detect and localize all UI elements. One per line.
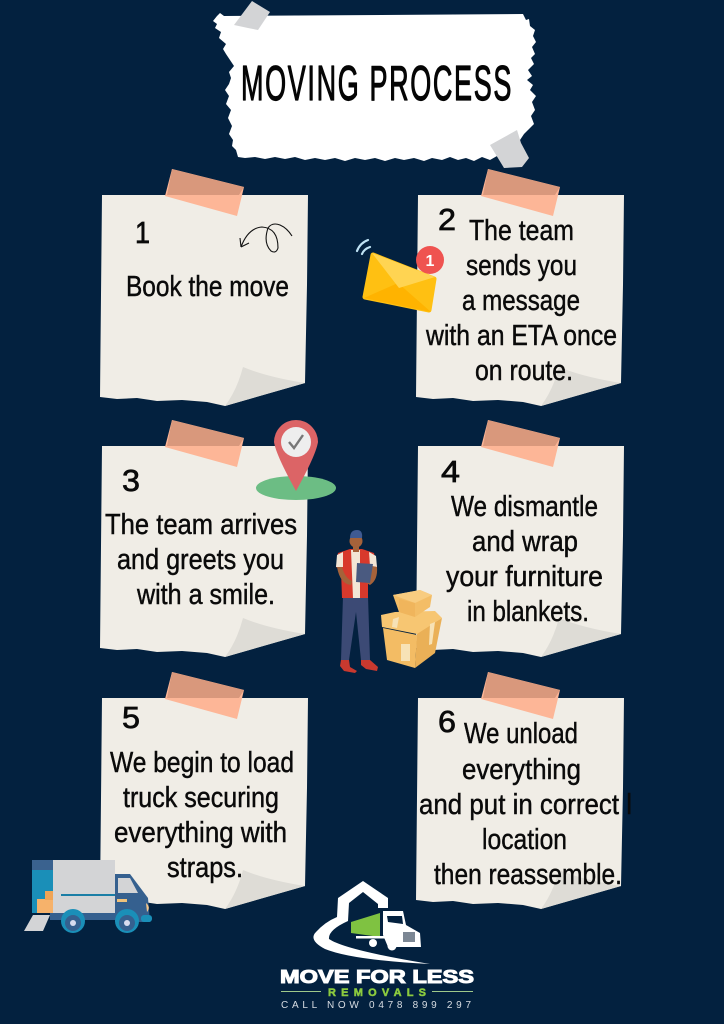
note 1 [100, 169, 308, 406]
number 6: 6 [438, 704, 456, 739]
logo: Move For Less Removals [280, 881, 474, 1011]
text [110, 747, 294, 884]
tape bottom [490, 130, 529, 168]
text: and put in correct l [419, 789, 632, 821]
text [419, 718, 632, 891]
text: on route. [475, 355, 573, 387]
text: with a smile. [136, 579, 275, 611]
logo mark: truck [351, 911, 421, 950]
note 4 [416, 420, 624, 657]
icon: envelope with notification [357, 240, 444, 312]
text [446, 491, 603, 628]
icon: mover with clipboard [336, 530, 378, 673]
text [105, 509, 297, 611]
icon: cardboard boxes [381, 590, 442, 668]
note 3 [100, 420, 308, 657]
text: location [482, 824, 567, 856]
text: with an ETA once [425, 320, 617, 352]
text: We begin to load [110, 747, 294, 779]
text: a message [462, 285, 580, 317]
company name: MOVE FOR LESS [280, 967, 474, 987]
title panel [213, 1, 536, 168]
text: The team arrives [105, 509, 297, 541]
icon: location pin [256, 420, 336, 500]
torn paper [213, 13, 536, 161]
number 4: 4 [441, 454, 460, 489]
text: straps. [167, 852, 243, 884]
text: We unload [464, 718, 578, 750]
note 6 [416, 672, 632, 909]
removals: REMOVALS [328, 987, 426, 999]
text: and wrap [472, 526, 578, 558]
number 3: 3 [122, 463, 140, 498]
text: everything [462, 754, 581, 786]
text: sends you [466, 250, 577, 282]
text: in blankets. [467, 596, 589, 628]
icon: envelope with notification: 1 [426, 253, 435, 270]
text: and greets you [117, 544, 284, 576]
number 2: 2 [438, 202, 456, 237]
number 5: 5 [122, 700, 140, 735]
text: everything with [114, 817, 287, 849]
number 1: 1 [135, 215, 150, 250]
text: The team [469, 215, 574, 247]
tape top [234, 1, 270, 30]
note 5 [100, 672, 308, 909]
text [425, 215, 617, 387]
phone: CALL NOW 0478 899 297 [281, 1000, 471, 1011]
text: truck securing [123, 782, 279, 814]
logo mark: house and swoosh [313, 881, 430, 964]
note 2 [416, 169, 624, 406]
icon: moving truck [24, 860, 152, 933]
text: Book the move [126, 271, 289, 303]
text: We dismantle [451, 491, 598, 523]
icon: squiggle arrow [240, 224, 292, 252]
text: then reassemble. [434, 859, 622, 891]
title text: MOVING PROCESS [241, 57, 513, 111]
text: your furniture [446, 561, 603, 593]
